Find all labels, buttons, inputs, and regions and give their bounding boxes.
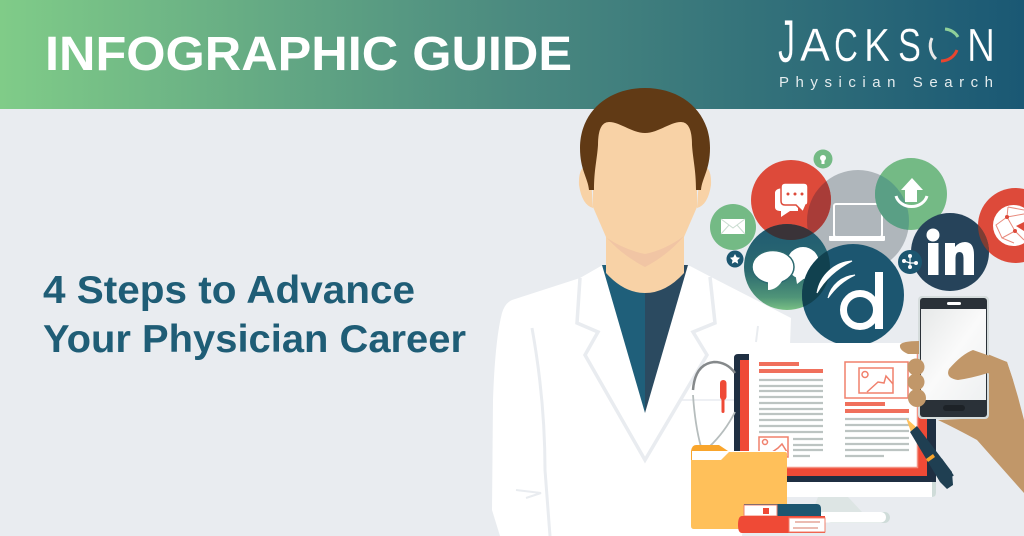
image placeholder large	[845, 362, 908, 398]
arm	[938, 353, 1024, 493]
logo: Jackson Physician Search: A	[800, 19, 830, 71]
thumb	[948, 350, 1013, 385]
title: INFOGRAPHIC GUIDE	[45, 28, 572, 81]
icon: chat bubbles on gradient circle	[744, 224, 827, 310]
header banner	[0, 0, 1024, 109]
phone	[918, 296, 989, 419]
monitor stand and base	[812, 497, 862, 512]
fingers	[900, 341, 919, 354]
icon: small green podcast	[814, 150, 832, 168]
doctor figure	[492, 88, 791, 536]
logo: Jackson Physician Search: N	[967, 19, 995, 71]
logo: Jackson Physician Search: J	[778, 8, 795, 75]
hand holding phone	[900, 296, 1024, 493]
face	[593, 115, 697, 253]
stethoscope	[693, 362, 735, 447]
subtitle: 4 Steps to Advance	[43, 269, 415, 312]
icon: envelope on green circle	[710, 204, 756, 250]
document page	[749, 343, 918, 468]
document text lines	[759, 380, 909, 456]
monitor bottom bezel	[786, 482, 936, 497]
image placeholder small	[759, 437, 788, 457]
subtitle	[43, 269, 466, 361]
document headings	[759, 362, 909, 413]
icon: upload on green circle	[875, 158, 947, 230]
logo: Jackson Physician Search: C	[834, 19, 858, 71]
logo: Jackson Physician Search: K	[864, 19, 890, 71]
shirt	[602, 265, 645, 413]
coat details	[516, 277, 758, 536]
logo: Jackson Physician Search	[778, 8, 995, 91]
logo ring	[930, 29, 958, 61]
icon: speech on red circle	[751, 160, 831, 233]
red panel	[740, 360, 927, 476]
icon: star badge	[726, 250, 744, 268]
icon: d logo circle	[802, 244, 904, 343]
logo: Jackson Physician Search: S	[898, 19, 921, 71]
subtitle: Your Physician Career	[43, 318, 466, 361]
pen	[906, 418, 953, 489]
red book	[738, 516, 825, 533]
logo: Jackson Physician Search: Physician Search	[779, 74, 993, 91]
ears	[579, 165, 711, 208]
icon: LinkedIn circle	[911, 213, 989, 291]
monitor with document	[734, 340, 936, 523]
lab coat	[492, 266, 791, 536]
icon: small teal share	[898, 250, 922, 274]
social icon cluster	[710, 150, 1024, 346]
shirt shadow	[645, 265, 688, 413]
icon: globe on red circle	[978, 188, 1024, 263]
hair	[580, 88, 710, 190]
folder	[691, 445, 787, 529]
neck shadow	[607, 236, 684, 267]
monitor frame	[734, 340, 936, 482]
neck	[606, 230, 684, 293]
books	[738, 504, 825, 533]
icon: laptop on grey circle	[807, 170, 909, 272]
teal book	[744, 504, 821, 516]
